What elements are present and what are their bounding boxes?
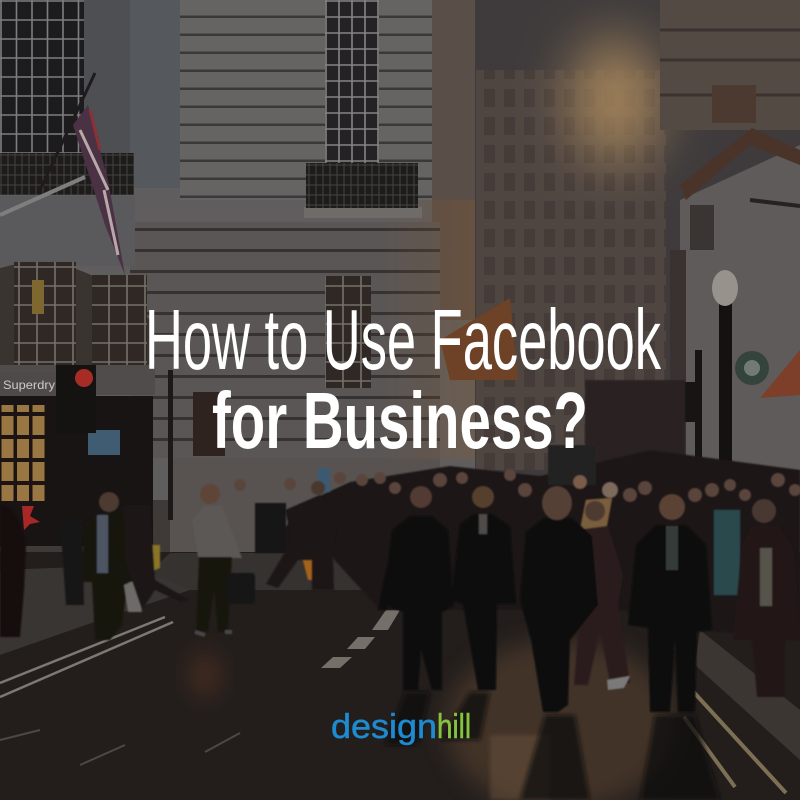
flag [0,73,125,275]
dark shopfront under title [585,380,685,470]
foreground people [0,481,800,712]
person: grey sweater [192,484,255,635]
lower windows [0,262,371,456]
long shadows on road [385,692,720,800]
person: man in overcoat [628,494,712,712]
person: woman in maroon [733,499,800,697]
logo: Designhill: hill [437,708,471,746]
person: back walker [60,505,190,610]
right white building [670,128,800,470]
street lamp and Starbucks sign [684,200,800,470]
person: man in dark coat [378,486,454,690]
person: man with tie [451,486,516,690]
distant orange flag [440,298,518,380]
main stone building [0,0,475,553]
title [145,293,661,465]
pavement and road [0,552,800,800]
crowd background [255,445,800,640]
person: red scarf [574,501,630,690]
shop front [0,372,153,546]
crowd heads [234,469,800,502]
person: hooded man [520,486,598,712]
logo: Designhill: design [331,708,437,746]
shop front: Superdry [3,378,55,392]
person: far left figure [0,505,26,637]
person: walker with orange bag [266,481,337,590]
balconies [0,153,422,218]
sky and sunlit distance [460,0,800,480]
title line 2: for Business? [212,376,588,465]
traffic light [56,365,173,520]
person: man with blue shirt [82,492,160,640]
